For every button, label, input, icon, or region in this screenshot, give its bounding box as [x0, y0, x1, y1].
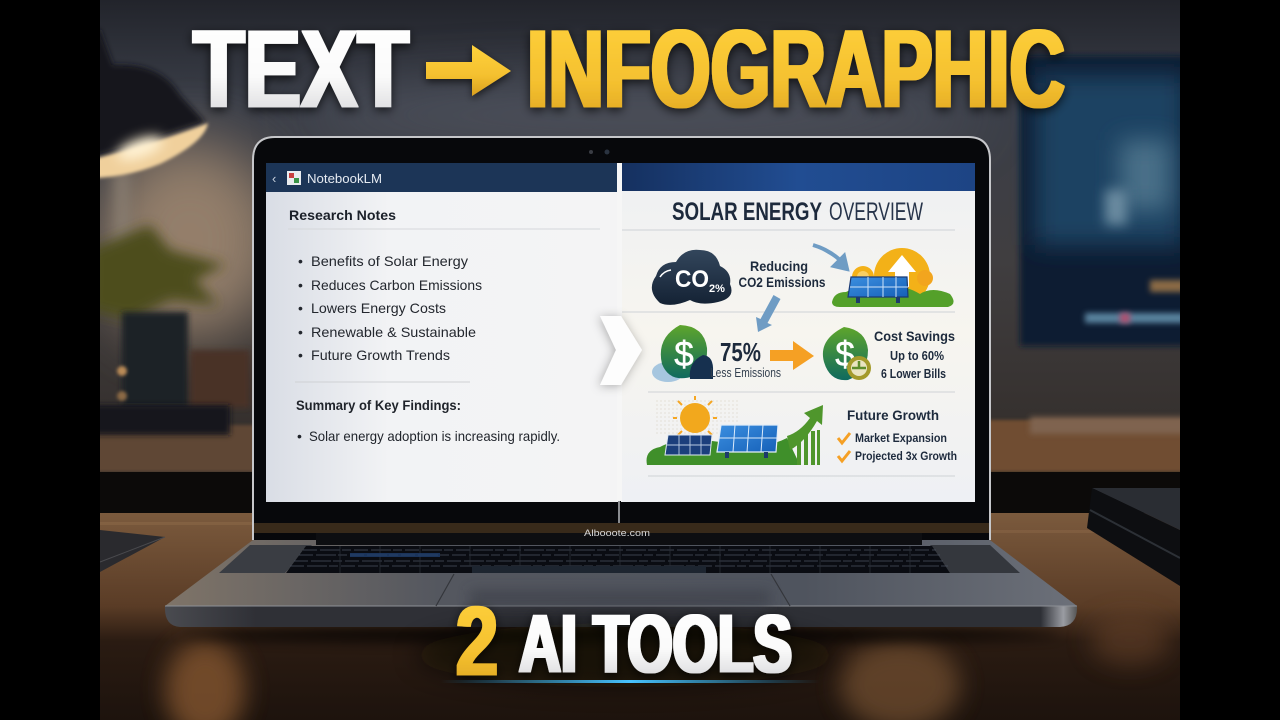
laptop — [165, 137, 1077, 643]
icon: CO2 cloud: CO — [675, 266, 709, 293]
icon: CO2 cloud — [652, 250, 732, 305]
shelf — [90, 417, 1190, 514]
label: reducing CO2 emissions — [738, 258, 826, 290]
background monitor — [1020, 56, 1190, 346]
infographic title: SOLAR ENERGY — [672, 198, 822, 226]
icon: CO2 cloud: 2% — [709, 283, 725, 295]
bullet list: • — [298, 277, 303, 293]
glowing blue underline — [440, 680, 820, 683]
arrow: orange — [770, 341, 814, 370]
label: reducing CO2 emissions: CO2 Emissions — [738, 274, 826, 290]
bullet list: • — [298, 347, 303, 363]
header bar: NotebookLM: ‹ — [272, 171, 276, 186]
title — [193, 8, 1065, 131]
lamp — [90, 30, 208, 255]
icon: white chevron — [600, 316, 642, 385]
stat: 75% less emissions: Less Emissions — [710, 365, 781, 380]
bullet list: Reduces Carbon Emissions — [311, 277, 482, 293]
panel: research notes — [266, 163, 618, 502]
summary of key findings: • — [297, 428, 302, 444]
stat: 75% less emissions — [710, 337, 781, 380]
icon: dollar badge: $ — [835, 335, 855, 374]
bullet list: • — [298, 300, 303, 316]
subtitle: 2 AI tools: 2 — [456, 586, 498, 696]
panel: solar energy infographic — [620, 163, 975, 502]
bullet list — [298, 253, 482, 363]
summary of key findings — [296, 397, 560, 444]
closed notebook left — [100, 530, 165, 572]
infographic title: OVERVIEW — [829, 198, 923, 226]
icon: dollar savings blob: $ — [674, 335, 694, 374]
label: cost savings — [874, 328, 955, 381]
bullet list: Lowers Energy Costs — [311, 300, 446, 316]
hinge label: Albooote.com — [584, 528, 650, 538]
screen bezel — [253, 137, 990, 540]
bullet list: Benefits of Solar Energy — [311, 253, 468, 269]
wooden desk — [100, 513, 1180, 720]
divider between panels — [617, 163, 622, 501]
title word: INFOGRAPHIC: INFOGRAPHIC — [527, 8, 1065, 131]
stacked books right — [1087, 488, 1180, 586]
background: blurred room scene — [90, 0, 1190, 520]
label: future growth: Market Expansion — [855, 431, 947, 445]
summary of key findings: Summary of Key Findings: — [296, 397, 461, 413]
label: future growth: Projected 3x Growth — [855, 449, 957, 463]
subtitle: 2 AI tools: AI TOOLS — [519, 597, 792, 690]
header bar: NotebookLM: NotebookLM — [307, 171, 382, 186]
arrow: down to emissions — [756, 295, 780, 332]
heading: research notes: Research Notes — [289, 207, 396, 223]
label: cost savings: 6 Lower Bills — [881, 366, 946, 381]
summary of key findings: Solar energy adoption is increasing rapidly. — [309, 428, 560, 444]
stat: 75% less emissions: 75% — [720, 337, 761, 367]
label: future growth — [838, 407, 957, 463]
plant and vase — [90, 225, 250, 435]
laptop base — [165, 540, 1077, 643]
keyboard — [286, 546, 950, 573]
arrow: to solar scene — [813, 245, 847, 269]
header bar: NotebookLM — [266, 163, 618, 192]
arrow: gold — [426, 45, 511, 96]
title word: TEXT: TEXT — [193, 8, 409, 131]
icon: solar panel with sun and up arrow — [832, 248, 954, 307]
subtitle: 2 AI tools — [415, 586, 835, 696]
label: reducing CO2 emissions: Reducing — [750, 258, 808, 274]
icon: solar panels and sun with growth arrow — [647, 396, 823, 465]
label: cost savings: Up to 60% — [890, 348, 944, 363]
bullet list: Renewable & Sustainable — [311, 324, 476, 340]
icon: dollar savings blob — [652, 325, 713, 382]
bullet list: • — [298, 324, 303, 340]
bullet list: Future Growth Trends — [311, 347, 450, 363]
label: cost savings: Cost Savings — [874, 328, 955, 344]
label: future growth: Future Growth — [847, 407, 939, 423]
bullet list: • — [298, 253, 303, 269]
icon: dollar badge — [823, 327, 871, 380]
